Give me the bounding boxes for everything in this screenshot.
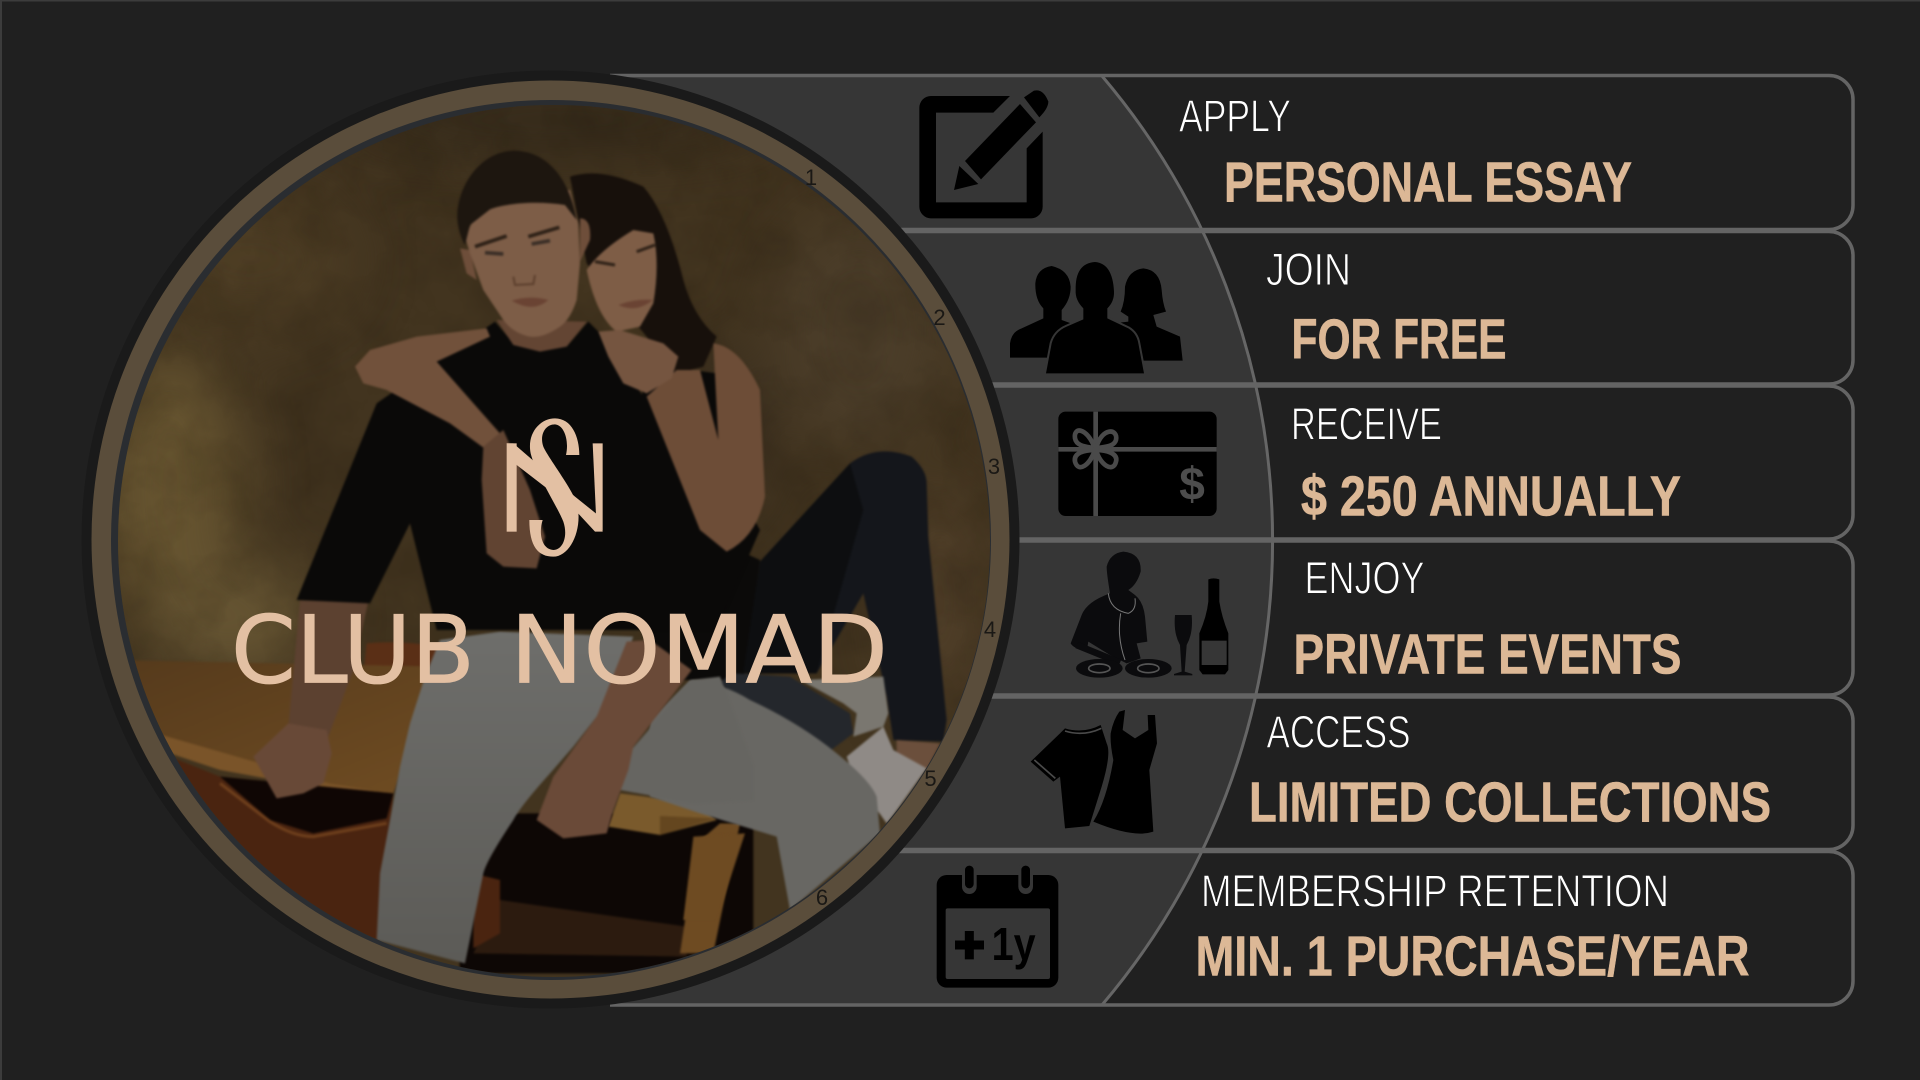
text: step 5: LIMITED COLLECTIONS — [1249, 771, 1771, 835]
icon: gift card — [1058, 412, 1217, 516]
step numbers: 3 — [988, 454, 1000, 479]
text: step 1: APPLY — [1179, 91, 1291, 142]
icon: calendar plus one year — [937, 870, 1058, 988]
title: NOMAD — [510, 596, 888, 706]
band arc line — [1102, 76, 1273, 1005]
step numbers: 5 — [924, 766, 937, 791]
text: step 1 — [1179, 91, 1632, 215]
text: step 5 — [1249, 707, 1771, 835]
step numbers — [805, 165, 1000, 910]
man forearm and left hand — [288, 593, 370, 737]
text: step 2: JOIN — [1266, 244, 1351, 295]
wall mottling — [130, 230, 974, 622]
row outlines — [610, 76, 1853, 1005]
woman leg, shoes, man thigh — [650, 420, 947, 920]
man torso, head, woman — [297, 151, 765, 630]
title: CLUB — [231, 596, 475, 706]
title — [231, 596, 888, 706]
text: step 3 — [1291, 398, 1681, 529]
couple and furniture, lower left — [110, 593, 753, 973]
panel: step rows — [610, 76, 1853, 1005]
text: step 5: ACCESS — [1266, 707, 1410, 758]
icon: clothes — [1031, 710, 1157, 834]
panel: curved icon band — [610, 76, 1273, 1005]
icon: members group — [1010, 262, 1183, 373]
photo: couple — [100, 90, 1000, 990]
text: step 6: MIN. 1 PURCHASE/YEAR — [1196, 925, 1750, 989]
text: step 3: RECEIVE — [1291, 398, 1442, 449]
man jeans and right arm — [377, 632, 753, 963]
text: step 4: PRIVATE EVENTS — [1294, 622, 1682, 686]
icon: dj and champagne — [1071, 552, 1228, 678]
panel: circular photo frame — [82, 70, 1020, 1008]
text: step 4: ENJOY — [1304, 552, 1424, 603]
text: step 4 — [1294, 552, 1682, 686]
step numbers: 2 — [933, 305, 946, 330]
step numbers: 1 — [805, 165, 817, 190]
step numbers: 4 — [984, 617, 996, 642]
step numbers: 6 — [816, 885, 828, 910]
text: step 1: PERSONAL ESSAY — [1224, 151, 1632, 215]
text: step 3: $ 250 ANNUALLY — [1301, 465, 1681, 529]
icon: gift card: $ — [1179, 457, 1205, 509]
icon: calendar plus one year: 1y — [992, 918, 1036, 970]
text: step 2 — [1266, 244, 1506, 371]
text: step 6 — [1196, 866, 1750, 989]
text: step 2: FOR FREE — [1292, 307, 1506, 371]
icon: edit pencil — [919, 90, 1048, 218]
icon: NS logo monogram — [507, 418, 603, 557]
text: step 6: MEMBERSHIP RETENTION — [1201, 866, 1669, 917]
